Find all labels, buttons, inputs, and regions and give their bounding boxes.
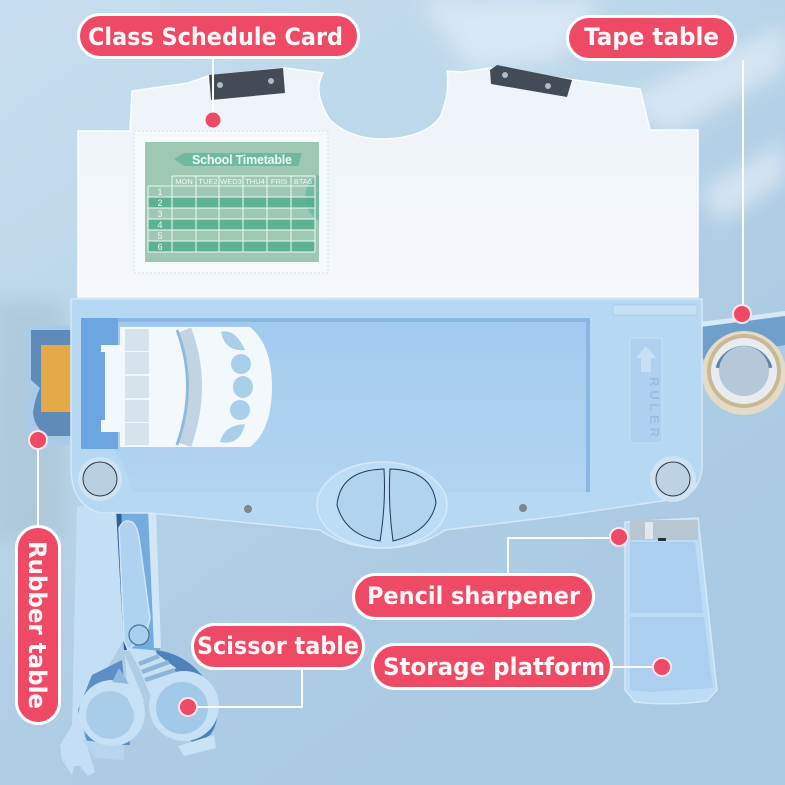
marker: scissor table (179, 698, 197, 716)
timetable grid (148, 174, 319, 252)
panel: pencil case tray (71, 299, 702, 548)
center latch buttons (317, 462, 447, 548)
leader line: class schedule card (212, 58, 214, 120)
timetable grid: 5 (157, 231, 163, 241)
icon: left metal clip (209, 68, 285, 100)
panel: tape table (700, 311, 785, 415)
timetable grid: TUE2 (198, 177, 218, 186)
label: class schedule card: Class Schedule Card (88, 23, 343, 51)
label: class schedule card (78, 14, 358, 58)
leader line: storage platform (613, 666, 662, 668)
panel: class schedule card (134, 131, 328, 273)
embossed ruler label (630, 338, 662, 443)
label: storage platform (372, 644, 612, 688)
marker: storage platform (653, 658, 671, 676)
timetable heading: School Timetable (192, 153, 292, 167)
organizer insert (101, 327, 272, 447)
marker: rubber table (29, 431, 47, 449)
right round button (650, 456, 696, 502)
timetable grid: BTA6 (294, 177, 312, 186)
icon: scissors (78, 521, 219, 760)
leader line: tape table (742, 60, 744, 314)
marker: class schedule card (206, 112, 220, 128)
label: pencil sharpener (354, 574, 594, 618)
label: storage platform: Storage platform (383, 653, 605, 681)
marker: pencil sharpener (610, 528, 628, 546)
icon: tape roll (702, 331, 785, 415)
marker: tape table (733, 305, 751, 323)
label: rubber table (16, 526, 60, 724)
embossed ruler label: RULER (647, 377, 662, 438)
timetable grid: 2 (157, 198, 163, 208)
label: rubber table: Rubber table (23, 541, 51, 709)
timetable grid: FRI5 (271, 177, 287, 186)
label: scissor table: Scissor table (197, 632, 359, 660)
timetable grid: MON (175, 177, 193, 186)
timetable grid: THU4 (245, 177, 265, 186)
icon: right metal clip (490, 65, 572, 97)
panel: scissor table (60, 506, 219, 776)
pencil well (81, 318, 590, 492)
label: scissor table (192, 624, 364, 668)
left round button (78, 457, 122, 501)
icon: rubber eraser (41, 345, 72, 412)
label: tape table: Tape table (584, 23, 719, 51)
panel: rubber table (25, 326, 72, 444)
timetable grid: 6 (157, 242, 163, 252)
timetable grid: WED3 (220, 177, 242, 186)
leader line: pencil sharpener (508, 538, 619, 573)
timetable grid: 4 (157, 220, 163, 230)
timetable grid: 3 (157, 209, 163, 219)
timetable grid: 1 (157, 187, 163, 197)
leader line: scissor table (188, 670, 302, 707)
slider strip (613, 305, 697, 315)
label: tape table (568, 16, 736, 60)
icon: pencil sharpener (630, 520, 698, 541)
leader line: rubber table (37, 440, 39, 526)
panel: pencil case lid (78, 65, 698, 297)
label: pencil sharpener: Pencil sharpener (367, 582, 580, 610)
panel: storage platform (625, 518, 717, 704)
